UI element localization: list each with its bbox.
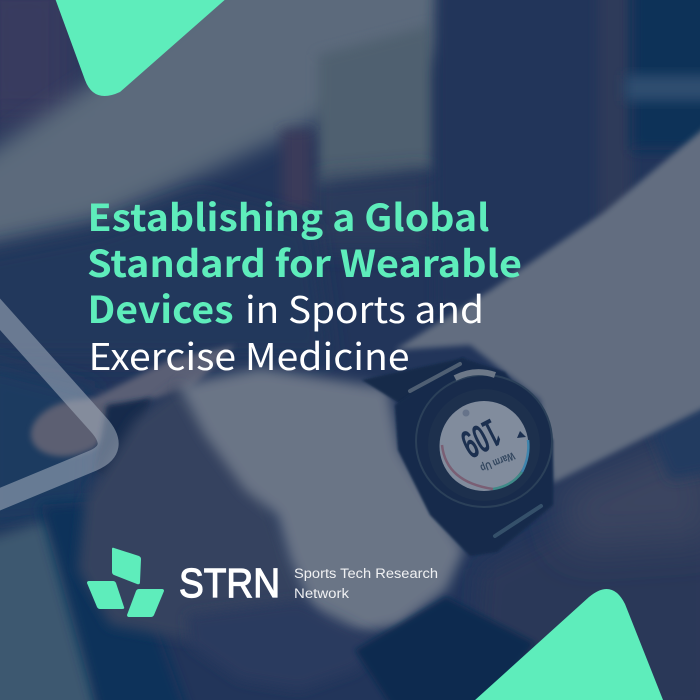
watch arrow marker	[517, 431, 526, 438]
watch zone arcs	[442, 445, 493, 489]
logo icon	[87, 548, 164, 617]
smartwatch	[362, 358, 553, 556]
title line 3 remainder: in Sports and	[245, 280, 484, 334]
logo tagline line 2: Network	[294, 586, 349, 601]
logo: STRN	[87, 548, 438, 617]
watch bezel	[416, 375, 552, 507]
title line 3 highlight: Devices	[88, 280, 234, 334]
watch strap	[362, 358, 470, 410]
watch reading: zone label: Warm Up	[478, 449, 516, 474]
logo wordmark: STRN	[179, 560, 280, 606]
watch reading: heart rate: 109	[454, 410, 507, 466]
watch lugs	[410, 364, 460, 391]
watch case	[395, 358, 553, 556]
title	[87, 188, 522, 381]
watch faint icon	[462, 410, 470, 416]
decorative triangle: top left	[52, 0, 236, 96]
title line 1: Establishing a Global	[88, 188, 490, 242]
watch face	[440, 401, 528, 491]
title line 4: Exercise Medicine	[88, 327, 410, 381]
title line 2: Standard for Wearable	[87, 234, 522, 288]
logo tagline line 1: Sports Tech Research	[294, 566, 438, 581]
decorative triangle: bottom right	[464, 589, 667, 700]
decorative triangle outline: left	[0, 247, 108, 524]
